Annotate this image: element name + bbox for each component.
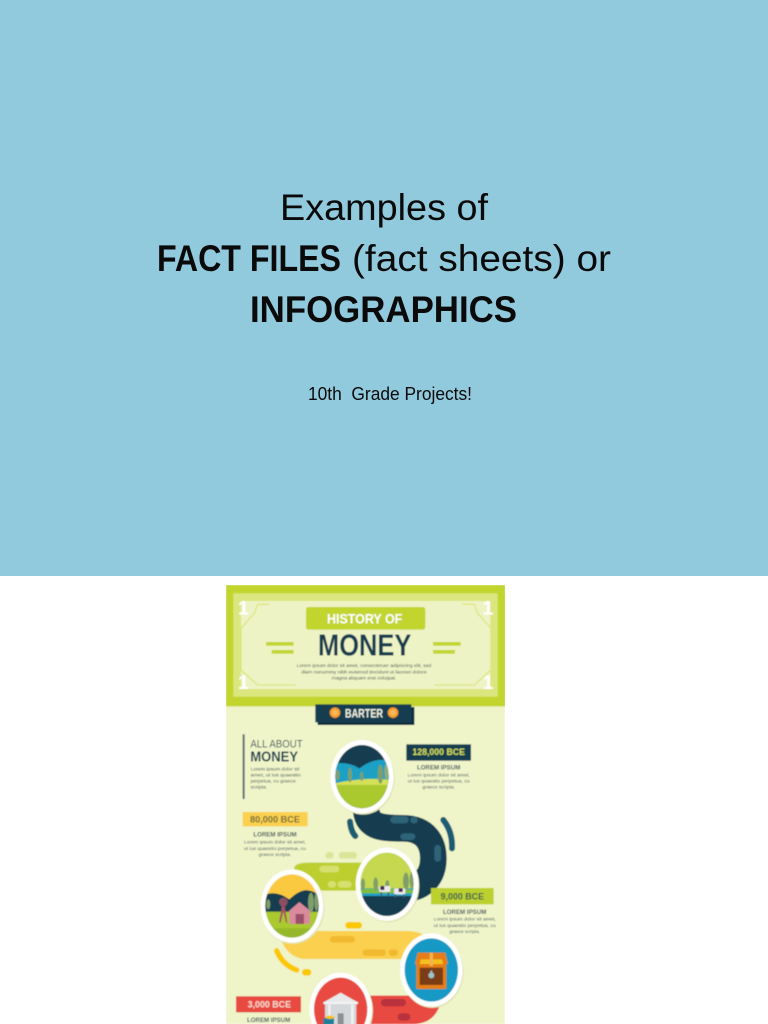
text block: 128,000 BCE description: graece scripta.: [422, 785, 455, 790]
road: dark navy segment: [350, 807, 452, 889]
date label: 9,000 BCE: [431, 888, 494, 904]
upper section: header and intro: [226, 585, 505, 815]
subtitle: 10th Grade Projects!: [308, 384, 472, 404]
text block: 3,000 BCE heading: LOREM IPSUM: [247, 1017, 291, 1024]
intro block: All about money: scripta.: [251, 784, 267, 789]
intro block: All about money: Lorem ipsum dolor sit: [251, 766, 300, 771]
heading pill: History of: [306, 607, 425, 630]
text block: 80,000 BCE description: LOREM IPSUM: [253, 832, 297, 839]
date label: 9,000 BCE: 9,000 BCE: [441, 891, 484, 901]
banknote header: [226, 585, 505, 706]
text block: 128,000 BCE description: Lorem ipsum dolor sit amet,: [408, 772, 470, 777]
text block: 80,000 BCE description: Lorem ipsum dolor sit amet,: [244, 840, 306, 845]
title line: INFOGRAPHICS: INFOGRAPHICS: [250, 289, 517, 330]
section banner: Barter: [315, 704, 414, 725]
icon: treasure chest: [415, 953, 448, 989]
numeral 1 corners: 1: [238, 598, 249, 619]
intro block: All about money: perpetua, cu graece: [251, 778, 296, 783]
heading: Money: MONEY: [318, 629, 411, 663]
text block: 80,000 BCE description: ut ius quaestio perpetua, cu: [244, 846, 306, 851]
text block: 128,000 BCE description: ut ius quaestio perpetua, cu: [408, 779, 470, 784]
text block: 9,000 BCE description: Lorem ipsum dolor sit amet,: [434, 917, 496, 922]
date label: 80,000 BCE: 80,000 BCE: [250, 815, 300, 825]
ornament dashes: [266, 642, 461, 654]
header description: diam nonummy nibh euismod tincidunt ut laoreet dolore: [301, 669, 427, 675]
title line: fact sheets or: (fact sheets) or: [352, 238, 611, 279]
lower timeline section: [236, 807, 496, 1024]
text block: 128,000 BCE description: [408, 764, 470, 790]
date label: 80,000 BCE: [243, 812, 308, 826]
date label: 128,000 BCE: [406, 744, 471, 761]
title line: Examples of: Examples of: [280, 187, 489, 228]
header description: [297, 663, 432, 682]
date label: 3,000 BCE: [236, 996, 301, 1012]
text block: 80,000 BCE description: graece scripta.: [259, 852, 291, 857]
numeral 1 corners: [238, 598, 494, 694]
section banner: Barter: BARTER: [345, 707, 383, 721]
intro block: All about money: [243, 734, 303, 799]
text block: 9,000 BCE description: ut ius quaestio perpetua, cu: [434, 923, 496, 928]
text block: 9,000 BCE description: graece scripta.: [449, 929, 480, 934]
road: green segment: [294, 852, 373, 891]
intro block: All about money: MONEY: [250, 750, 298, 766]
title line: FACT FILES: FACT FILES: [157, 238, 341, 279]
intro block: All about money: ALL ABOUT: [250, 739, 303, 751]
numeral 1 corners: 1: [483, 673, 494, 694]
infographic poster: History of Money: [226, 585, 505, 1024]
heading pill: History of: HISTORY OF: [327, 611, 403, 627]
title slide panel: [0, 0, 768, 576]
text block: 9,000 BCE description: [434, 909, 496, 934]
scene circle: bank building: [309, 973, 373, 1024]
text block: 9,000 BCE description: LOREM IPSUM: [443, 909, 487, 916]
numeral 1 corners: 1: [483, 598, 494, 619]
scene circle: cows by river: [356, 848, 419, 922]
date label: 3,000 BCE: 3,000 BCE: [248, 999, 291, 1009]
scene circle: farm with barn and windmill: [261, 869, 324, 944]
header description: magna aliquam erat volutpat.: [332, 676, 396, 682]
text block: 128,000 BCE description: LOREM IPSUM: [417, 764, 461, 771]
header description: Lorem ipsum dolor sit amet, consectetuer adipiscing elit, sed: [297, 663, 432, 669]
road: yellow segment: [277, 922, 426, 976]
scene circle: treasure chest: [400, 933, 464, 1008]
date label: 128,000 BCE: 128,000 BCE: [412, 747, 465, 757]
text block: 80,000 BCE description: [244, 832, 306, 857]
road: red segment: [370, 995, 440, 1024]
scene circle: mountains and meadow: [330, 740, 395, 815]
intro block: All about money: amet, ut ius quaestio: [251, 772, 301, 777]
numeral 1 corners: 1: [238, 673, 249, 694]
